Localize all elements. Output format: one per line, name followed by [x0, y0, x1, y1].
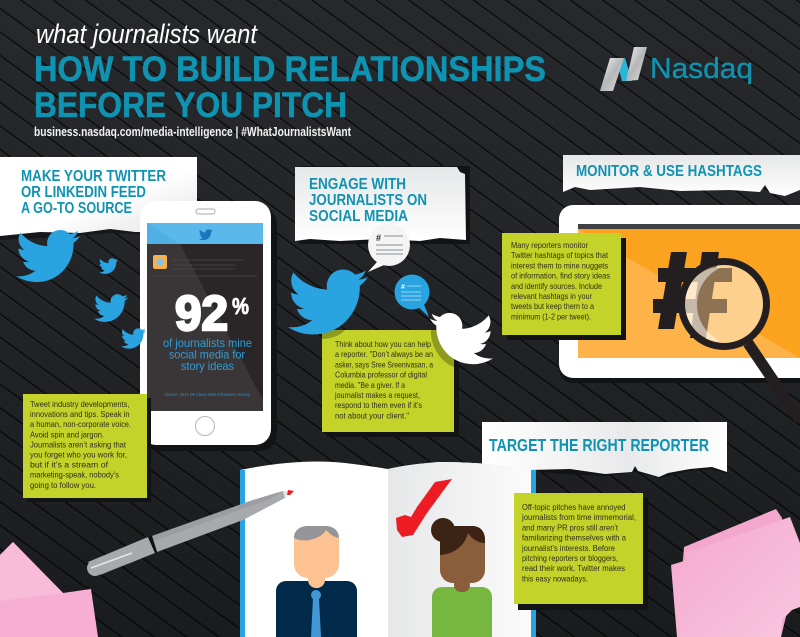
- stat caption: social media for: [169, 348, 245, 362]
- callout: tweet developments: innovations and tips. Speak in: [30, 409, 130, 419]
- callout: be a giver: Columbia professor of digital: [335, 370, 427, 380]
- panel: target the right reporter: [240, 422, 727, 637]
- callout: reporters monitor hashtags: interest them to mine nuggets: [511, 260, 608, 270]
- sticky notes: right: [671, 509, 800, 637]
- icon: magnifying glass: [678, 258, 797, 423]
- icon: red check mark: [396, 479, 452, 537]
- callout: tweet developments: Journalists aren’t asking that: [30, 439, 127, 449]
- banner: target the right reporter: TARGET THE RIGHT REPORTER: [489, 435, 709, 455]
- callout: off-topic pitches: read their work. Twitter makes: [522, 563, 625, 573]
- callout: tweet developments: a human, non-corporate voice.: [30, 419, 131, 429]
- stat caption: [163, 336, 252, 373]
- icon: blue speech bubble: #: [401, 284, 405, 291]
- tablet: [559, 205, 800, 420]
- logo wordmark: Nasdaq: [650, 53, 753, 85]
- banner: make your feed a go-to source: OR LINKEDIN FEED: [21, 184, 146, 201]
- source note: Source: 2014 D5 Cision Web Influencers Survey: [165, 392, 251, 397]
- figure: woman reporter: [431, 518, 492, 637]
- callout: be a giver: a reporter. "Don’t always be an: [335, 349, 433, 359]
- logo: Nasdaq: [600, 47, 753, 91]
- callout: off-topic pitches: familiarizing themselves with a: [522, 533, 626, 543]
- callout: be a giver: [322, 330, 459, 437]
- callout: reporters monitor hashtags: Twitter hashtags of topics that: [511, 250, 609, 260]
- banner: target the right reporter: [482, 422, 727, 478]
- open book: [240, 462, 536, 637]
- callout: be a giver: respond to them even if it’s: [335, 400, 422, 410]
- icon: large bird: [16, 230, 80, 282]
- callout: tweet developments: Avoid spin and jargon.: [30, 429, 104, 439]
- callout: reporters monitor hashtags: [502, 233, 626, 340]
- icon: white speech bubble: #: [376, 233, 381, 243]
- tweet lines: [153, 260, 257, 276]
- callout: off-topic pitches: journalist’s interests. Before: [521, 543, 615, 553]
- banner: engage with journalists: [295, 166, 470, 244]
- stat: 92%: 92: [175, 287, 228, 341]
- banner: engage with journalists: ENGAGE WITH: [309, 176, 406, 193]
- icon: hashtag: [653, 252, 732, 338]
- icon: white bird: [430, 313, 493, 364]
- stat caption: story ideas: [181, 359, 234, 373]
- callout: be a giver: Think about how you can help: [335, 339, 431, 349]
- callout: off-topic pitches: pitching reporters or bloggers,: [522, 553, 618, 563]
- callout: tweet developments: going to follow you.: [30, 480, 96, 490]
- logo mark: [600, 47, 647, 91]
- icon: medium bird: [94, 294, 128, 322]
- banner: make your feed a go-to source: [0, 157, 197, 240]
- url and hashtag line: business.nasdaq.com/media-intelligence | #WhatJournalistsWant: [34, 125, 352, 139]
- banner: engage with journalists: JOURNALISTS ON: [309, 192, 427, 209]
- title line 2: BEFORE YOU PITCH: [34, 86, 347, 125]
- callout: tweet developments: you forget who you work for,: [30, 450, 127, 460]
- icon: avatar: [153, 255, 167, 269]
- icon: white speech bubble: [368, 224, 410, 272]
- callout: off-topic pitches: journalists from time immemorial,: [521, 512, 636, 522]
- callout: off-topic pitches: Off-topic pitches have annoyed: [522, 502, 626, 512]
- callout: be a giver: media. "Be a giver. If a: [335, 380, 405, 390]
- stat caption: of journalists mine: [163, 336, 252, 350]
- callout: be a giver: journalist makes a request,: [334, 390, 420, 400]
- callout: tweet developments: [23, 394, 151, 502]
- banner: monitor and use hashtags: MONITOR & USE HASHTAGS: [576, 163, 762, 180]
- callout: off-topic pitches: this easy nowadays.: [522, 573, 588, 583]
- stat: 92%: %: [232, 293, 249, 319]
- callout: off-topic pitches: [514, 493, 648, 610]
- callout: off-topic pitches: and many PR pros still aren’t: [522, 522, 619, 532]
- callout: tweet developments: marketing-speak, nobody’s: [30, 470, 119, 480]
- callout: tweet developments: Tweet industry developments,: [30, 399, 130, 409]
- panel: engage with journalists: [288, 166, 493, 437]
- callout: reporters monitor hashtags: minimum (1-2 per tweet).: [511, 311, 591, 321]
- banner: engage with journalists: SOCIAL MEDIA: [309, 208, 408, 225]
- pen: [87, 490, 294, 576]
- icon: blue bird: [288, 269, 368, 334]
- callout: be a giver: not about your client.": [335, 410, 409, 420]
- panel: twitter feed: [0, 157, 277, 502]
- header: [34, 19, 546, 139]
- callout: reporters monitor hashtags: and identify sources. Include: [511, 281, 602, 291]
- icon: bird at phone edge: [121, 328, 146, 349]
- title line 1: HOW TO BUILD RELATIONSHIPS: [34, 50, 546, 89]
- banner: make your feed a go-to source: A GO-TO SOURCE: [21, 200, 132, 217]
- banner: monitor and use hashtags: [563, 155, 800, 196]
- callout: reporters monitor hashtags: Many reporters monitor: [511, 240, 588, 250]
- figure: man reporter: [276, 526, 357, 637]
- callout: reporters monitor hashtags: of information, find story ideas: [511, 271, 610, 281]
- callout: reporters monitor hashtags: tweets but keep them to a: [511, 301, 594, 311]
- icon: phone header bird: [199, 229, 212, 240]
- callout: reporters monitor hashtags: relevant hashtags in your: [511, 291, 592, 301]
- banner: make your feed a go-to source: MAKE YOUR TWITTER: [21, 168, 166, 185]
- icon: blue speech bubble: [394, 274, 430, 317]
- phone: [140, 201, 277, 451]
- icon: small bird: [99, 258, 118, 274]
- panel: hashtags: [502, 155, 800, 420]
- callout: be a giver: asker, says Sree Sreenivasan, a: [335, 359, 433, 369]
- kicker: what journalists want: what journalists want: [36, 19, 258, 49]
- sticky notes: left: [0, 542, 98, 637]
- callout: tweet developments: but if it’s a stream of: [30, 460, 109, 470]
